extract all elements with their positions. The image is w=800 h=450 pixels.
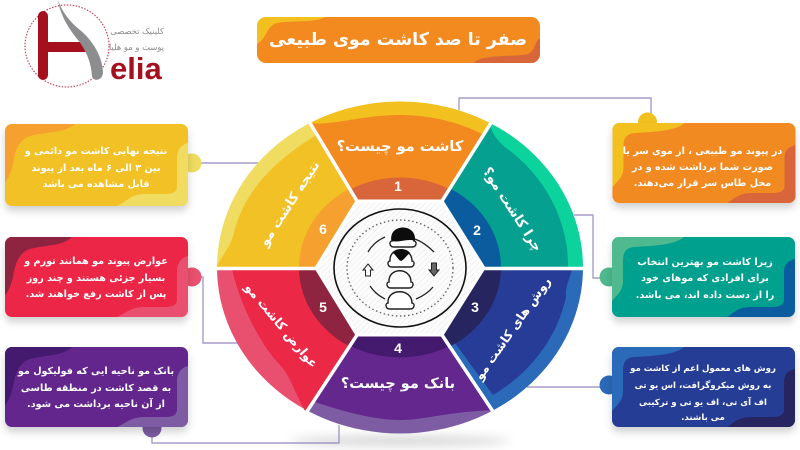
icon: bald head <box>387 271 413 288</box>
text: عوارض پیوند مو همانند تورم و <box>23 256 168 267</box>
text: صورت شما برداشت شده و در <box>631 162 773 173</box>
text: می باشند. <box>681 413 725 423</box>
text <box>17 366 174 410</box>
panel: result (yellow) <box>5 124 202 206</box>
segment 3 blue <box>444 270 583 410</box>
text: اف آی تی، اف یو تی و ترکیبی <box>639 396 767 408</box>
wheel ground shadow <box>290 436 510 446</box>
text: بین ۳ الی ۶ ماه بعد از پیوند <box>31 163 161 174</box>
icon: up arrow <box>363 264 373 276</box>
text <box>623 146 782 189</box>
text: بانک مو ناحیه ایی که فولیکول مو <box>17 366 174 377</box>
segment label 1: کاشت مو چیست؟ <box>337 139 464 155</box>
panel: side effects (red) <box>5 237 202 317</box>
icon: bald head lower <box>386 292 414 309</box>
segment label 5: عوارض کاشت مو <box>241 279 321 371</box>
text <box>24 146 167 190</box>
segment 6 yellow <box>216 124 355 267</box>
segment 4 purple <box>309 336 491 434</box>
number 6: 6 <box>319 221 327 237</box>
number 1: 1 <box>394 178 402 194</box>
text: به روش میکروگرافت، اس یو تی <box>635 380 771 391</box>
wheel <box>210 102 590 434</box>
text: در پیوند مو طبیعی ، از موی سر یا <box>623 146 782 157</box>
text <box>23 256 168 300</box>
title text: صفر تا صد کاشت موی طبیعی <box>269 30 527 50</box>
logo: Helia clinic <box>25 0 165 87</box>
text: به قصد کاشت در منطقه طاسی <box>21 383 171 394</box>
number 5: 5 <box>319 299 327 315</box>
text: برای افرادی که موهای خود <box>641 273 769 284</box>
text: از آن ناحیه برداشت می شود. <box>27 397 165 410</box>
icon: full hair head <box>390 227 416 247</box>
text: پس از کاشت رفع خواهند شد. <box>26 289 166 300</box>
segment 5 red <box>217 270 355 411</box>
title banner <box>257 17 540 63</box>
logo subtitle line 2: پوست و مو هلیا <box>109 42 165 52</box>
panel: methods (blue) <box>600 347 795 427</box>
panel: why (teal) <box>600 237 795 317</box>
segment 2 teal <box>444 124 583 267</box>
panel: definition (orange) <box>612 112 796 203</box>
text: زیرا کاشت مو بهترین انتخاب <box>637 257 773 268</box>
segment label 6: نتیجه کاشت مو <box>257 158 323 250</box>
segment label 4: بانک مو چیست؟ <box>341 376 455 392</box>
logo subtitle line 1: کلینیک تخصصی <box>110 26 164 36</box>
logo wordmark: elia <box>110 51 162 86</box>
logo letter H <box>38 11 88 80</box>
text <box>629 364 776 423</box>
segment 1 top orange <box>312 102 490 200</box>
text: را از دست داده اند، می باشد. <box>636 290 774 301</box>
panel: hair bank (purple) <box>5 347 188 438</box>
logo hair strand <box>58 0 103 80</box>
segment label 2: چرا کاشت مو؟ <box>479 164 545 255</box>
text <box>636 257 774 301</box>
text: قابل مشاهده می باشد <box>42 179 150 190</box>
number 3: 3 <box>471 299 479 315</box>
icon: thinning hair head <box>388 249 414 267</box>
text: روش های معمول اعم از کاشت مو <box>629 364 776 374</box>
text: محل طاس سر قرار می‌دهند. <box>634 178 771 189</box>
center circle icon <box>334 209 466 327</box>
segment label 3: روش های کاشت مو <box>471 274 554 383</box>
number 4: 4 <box>394 340 402 356</box>
text: نتیجه نهایی کاشت مو دائمی و <box>24 146 167 157</box>
connector lines <box>152 98 651 443</box>
icon: down arrow <box>429 263 439 276</box>
logo dotted circle <box>25 5 109 87</box>
center hexagon <box>316 201 484 335</box>
number 2: 2 <box>473 222 481 238</box>
text: بسیار جزئی هستند و چند روز <box>26 273 165 284</box>
